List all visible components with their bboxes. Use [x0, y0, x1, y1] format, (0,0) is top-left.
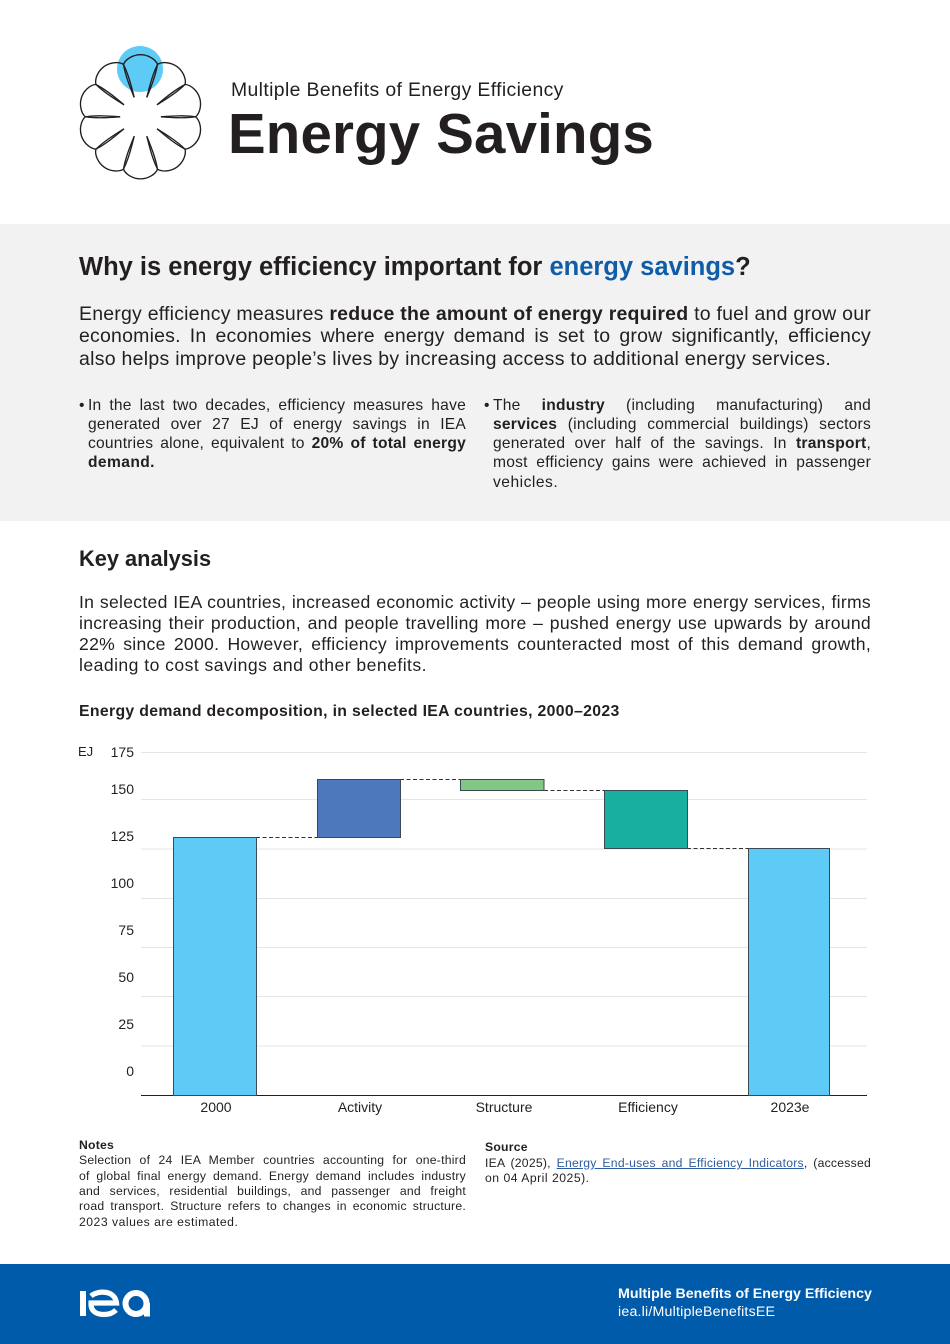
x axis labels: 2023e [771, 1099, 809, 1115]
bullet: sectors: • [484, 397, 490, 414]
notes: and services, residential buildings, and passenger and freight [79, 1184, 466, 1198]
icon: flower logo with blue circle [80, 46, 202, 180]
notes [79, 1138, 466, 1229]
bullet: sectors: generated over half of the savings. In transport, [493, 435, 871, 452]
y axis labels: 75 [118, 922, 134, 938]
key analysis paragraph: leading to cost savings and other benefits. [79, 655, 427, 675]
x axis labels [200, 1099, 809, 1115]
intro paragraph [79, 303, 871, 370]
bar: activity [318, 780, 400, 838]
bullet: efficiency savings: demand. [88, 454, 155, 471]
title: Energy Savings [228, 102, 654, 165]
y axis labels: 0 [126, 1063, 134, 1079]
footer text: Multiple Benefits of Energy Efficiency [618, 1286, 872, 1302]
footer text [618, 1286, 872, 1320]
bullet: sectors: most efficiency gains were achieved in passenger [493, 454, 871, 471]
footer text: iea.li/MultipleBenefitsEE [618, 1304, 775, 1320]
bullet: efficiency savings: countries alone, equivalent to 20% of total energy [88, 435, 466, 452]
key analysis paragraph [79, 592, 871, 675]
y axis labels: 100 [111, 875, 134, 891]
notes: 2023 values are estimated. [79, 1215, 238, 1229]
x axis labels: Structure [476, 1099, 532, 1115]
key analysis paragraph: 22% since 2000. However, efficiency improvements counteracted most of this demand growth, [79, 634, 871, 654]
intro paragraph: economies. In economies where energy demand is set to grow significantly, efficiency [79, 325, 871, 347]
panel: why energy efficiency matters [0, 224, 950, 521]
heading: key analysis: Key analysis [79, 546, 211, 571]
y axis labels: 150 [111, 781, 134, 797]
panel heading: Why is energy efficiency important for energy savings? [79, 252, 751, 280]
bullet: sectors [484, 397, 871, 491]
x axis labels: Activity [338, 1099, 382, 1115]
y axis labels: 125 [111, 828, 134, 844]
waterfall chart [78, 744, 867, 1115]
subtitle: Multiple Benefits of Energy Efficiency [231, 79, 564, 101]
source: IEA (2025), Energy End-uses and Efficiency Indicators, (accessed [485, 1156, 871, 1170]
bar: 2023e [748, 848, 830, 1096]
key analysis paragraph: In selected IEA countries, increased economic activity – people using more energy services, firms [79, 592, 871, 612]
intro paragraph: also helps improve people’s lives by increasing access to additional energy services. [79, 348, 831, 370]
y axis labels: 175 [111, 744, 134, 760]
notes: road transport. Structure refers to changes in economic structure. [79, 1199, 466, 1213]
y axis labels [111, 744, 134, 1079]
bar: efficiency [604, 790, 688, 848]
x axis labels: 2000 [200, 1099, 232, 1115]
bullet: efficiency savings: generated over 27 EJ of energy savings in IEA [88, 416, 466, 433]
bullet: sectors: vehicles. [493, 474, 558, 491]
notes: of global final energy demand. Energy demand includes industry [79, 1169, 466, 1183]
notes: Notes [79, 1138, 114, 1152]
bullet: sectors: services (including commercial buildings) sectors [493, 416, 871, 433]
source: Source [485, 1140, 528, 1154]
bullet: efficiency savings [79, 397, 466, 471]
key analysis paragraph: increasing their production, and people travelling more – pushed energy use upwards by around [79, 613, 871, 633]
bar: 2000 [174, 838, 256, 1096]
IEA logo [80, 1290, 150, 1318]
y axis unit: EJ [78, 744, 93, 759]
source [485, 1140, 871, 1185]
bullet: efficiency savings: In the last two decades, efficiency measures have [88, 397, 466, 414]
y axis labels: 25 [118, 1016, 134, 1032]
y axis labels: 50 [118, 969, 134, 985]
bullet: efficiency savings: • [79, 397, 85, 414]
chart title: Energy demand decomposition, in selected IEA countries, 2000–2023 [79, 703, 620, 720]
bar: structure [460, 780, 544, 790]
x axis labels: Efficiency [618, 1099, 678, 1115]
bullet: sectors: The industry (including manufacturing) and [493, 397, 871, 414]
intro paragraph: Energy efficiency measures reduce the amount of energy required to fuel and grow our [79, 303, 871, 325]
notes: Selection of 24 IEA Member countries accounting for one-third [79, 1153, 466, 1167]
footer band [0, 1264, 950, 1344]
source: on 04 April 2025). [485, 1171, 590, 1185]
